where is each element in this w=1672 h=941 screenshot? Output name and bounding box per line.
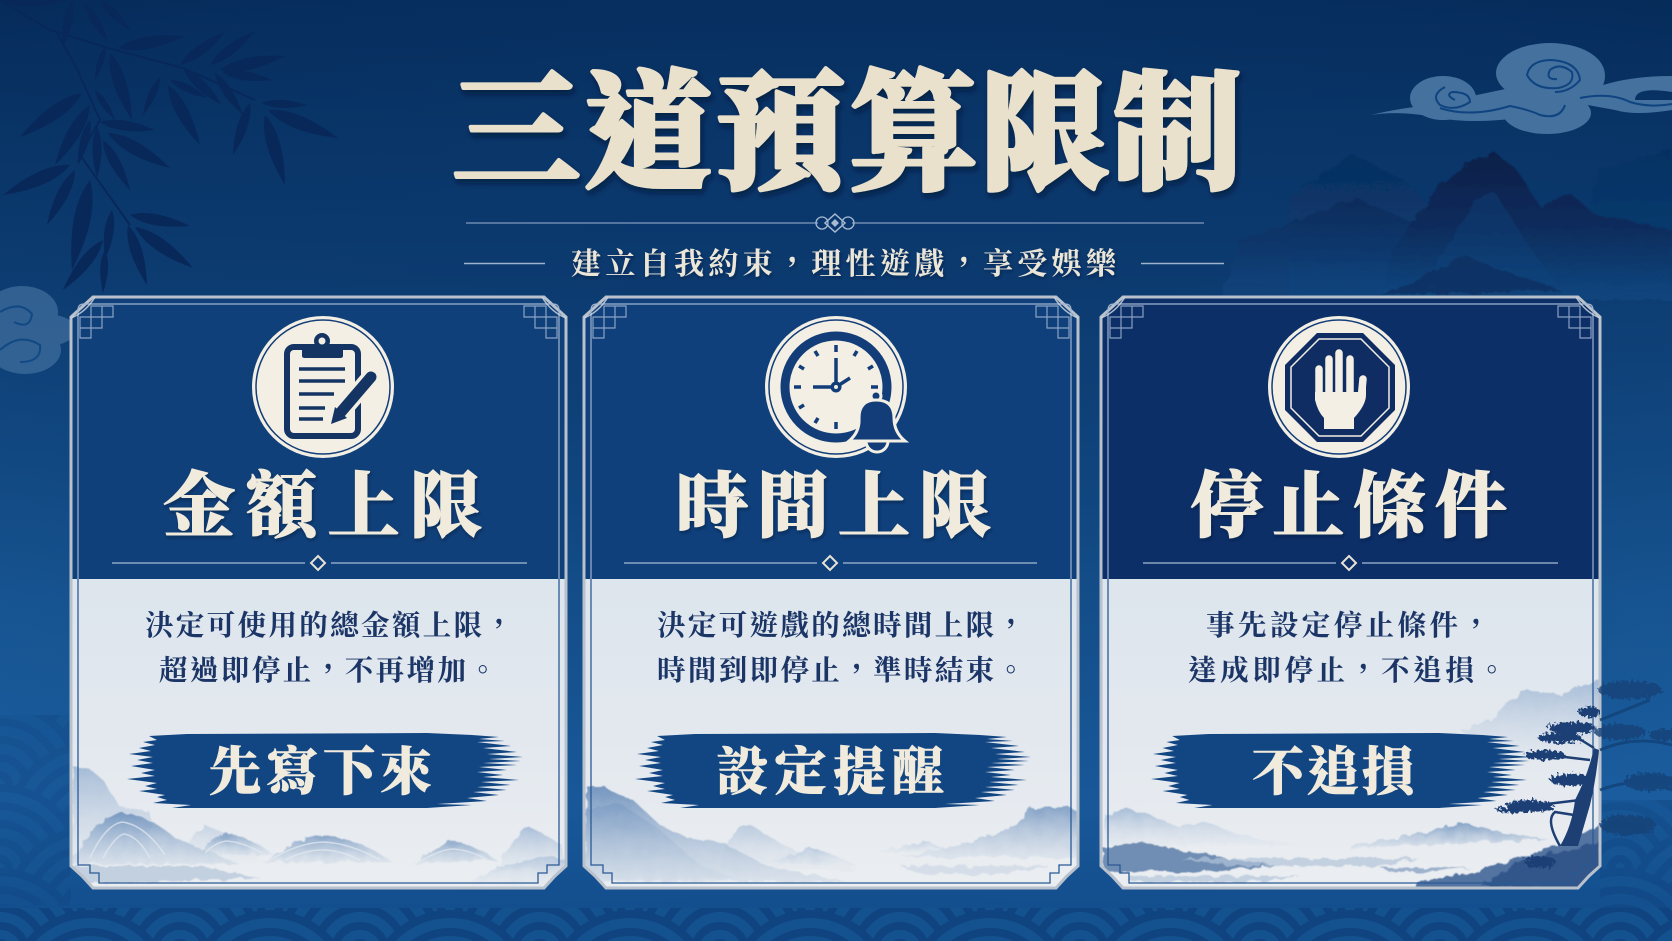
- card 3 frame: [1101, 297, 1600, 888]
- icon: stop hand: [1268, 316, 1410, 458]
- card 2 corner lattice: [584, 297, 1078, 338]
- card 2 body text: 時間到即停止，準時結束。: [657, 655, 1025, 687]
- card 1 header background: [71, 297, 566, 579]
- card 2 brush label: 設定提醒: [716, 744, 944, 802]
- cloud: left: [0, 286, 76, 374]
- card 3 landscape: [1103, 680, 1602, 890]
- card 3 corner lattice: [1101, 297, 1600, 338]
- pine tree: [1496, 681, 1672, 868]
- card 1 heading: 金額上限: [163, 467, 482, 547]
- card 3 body text: 事先設定停止條件，: [1206, 610, 1490, 642]
- card 1 body text: [145, 610, 513, 687]
- card 1 frame: [71, 297, 566, 888]
- card 2 paper background: [584, 579, 1078, 889]
- card 2 frame: [584, 297, 1078, 888]
- subtitle: 建立自我約束，理性遊戲，享受娛樂: [571, 248, 1118, 281]
- card 3 header background: [1101, 297, 1600, 579]
- card 1 body text: 決定可使用的總金額上限，: [145, 610, 513, 642]
- background mountains: top right: [1220, 150, 1672, 300]
- panel: 停止條件: [1101, 297, 1602, 890]
- card 2 body text: [657, 610, 1025, 687]
- cloud: top right: [1371, 43, 1672, 134]
- panel: 金額上限: [71, 297, 566, 889]
- card 1 landscape: [72, 767, 566, 885]
- card 3 heading: 停止條件: [1191, 467, 1507, 547]
- card 1 body text: 超過即停止，不再增加。: [159, 655, 497, 687]
- card 1 divider: [112, 556, 527, 570]
- panel: 時間上限: [584, 297, 1078, 889]
- bamboo branch: [0, 0, 341, 294]
- card 2 brush label: [635, 733, 1031, 808]
- card 3 paper background: [1101, 579, 1600, 889]
- card 2 landscape: [585, 787, 1078, 882]
- card 2 body text: 決定可遊戲的總時間上限，: [657, 610, 1025, 642]
- card 1 brush label: 先寫下來: [209, 744, 433, 802]
- card 1 brush label: [127, 733, 523, 808]
- card 2 divider: [624, 556, 1037, 570]
- title: 三道預算限制: [452, 64, 1241, 206]
- card 1 paper background: [71, 579, 566, 889]
- card 3 divider: [1143, 556, 1558, 570]
- card 3 body text: 達成即停止，不追損。: [1188, 655, 1506, 687]
- card 3 body text: [1188, 610, 1506, 687]
- card 2 heading: 時間上限: [676, 467, 991, 547]
- card 3 brush label: 不追損: [1252, 744, 1417, 802]
- bottom wave pattern: [0, 715, 1672, 941]
- title divider: [466, 214, 1204, 232]
- icon: clock with bell: [765, 316, 907, 458]
- card 1 corner lattice: [71, 297, 566, 338]
- card 3 brush label: [1151, 733, 1531, 808]
- icon: clipboard and pencil: [252, 316, 394, 458]
- card 2 header background: [584, 297, 1078, 579]
